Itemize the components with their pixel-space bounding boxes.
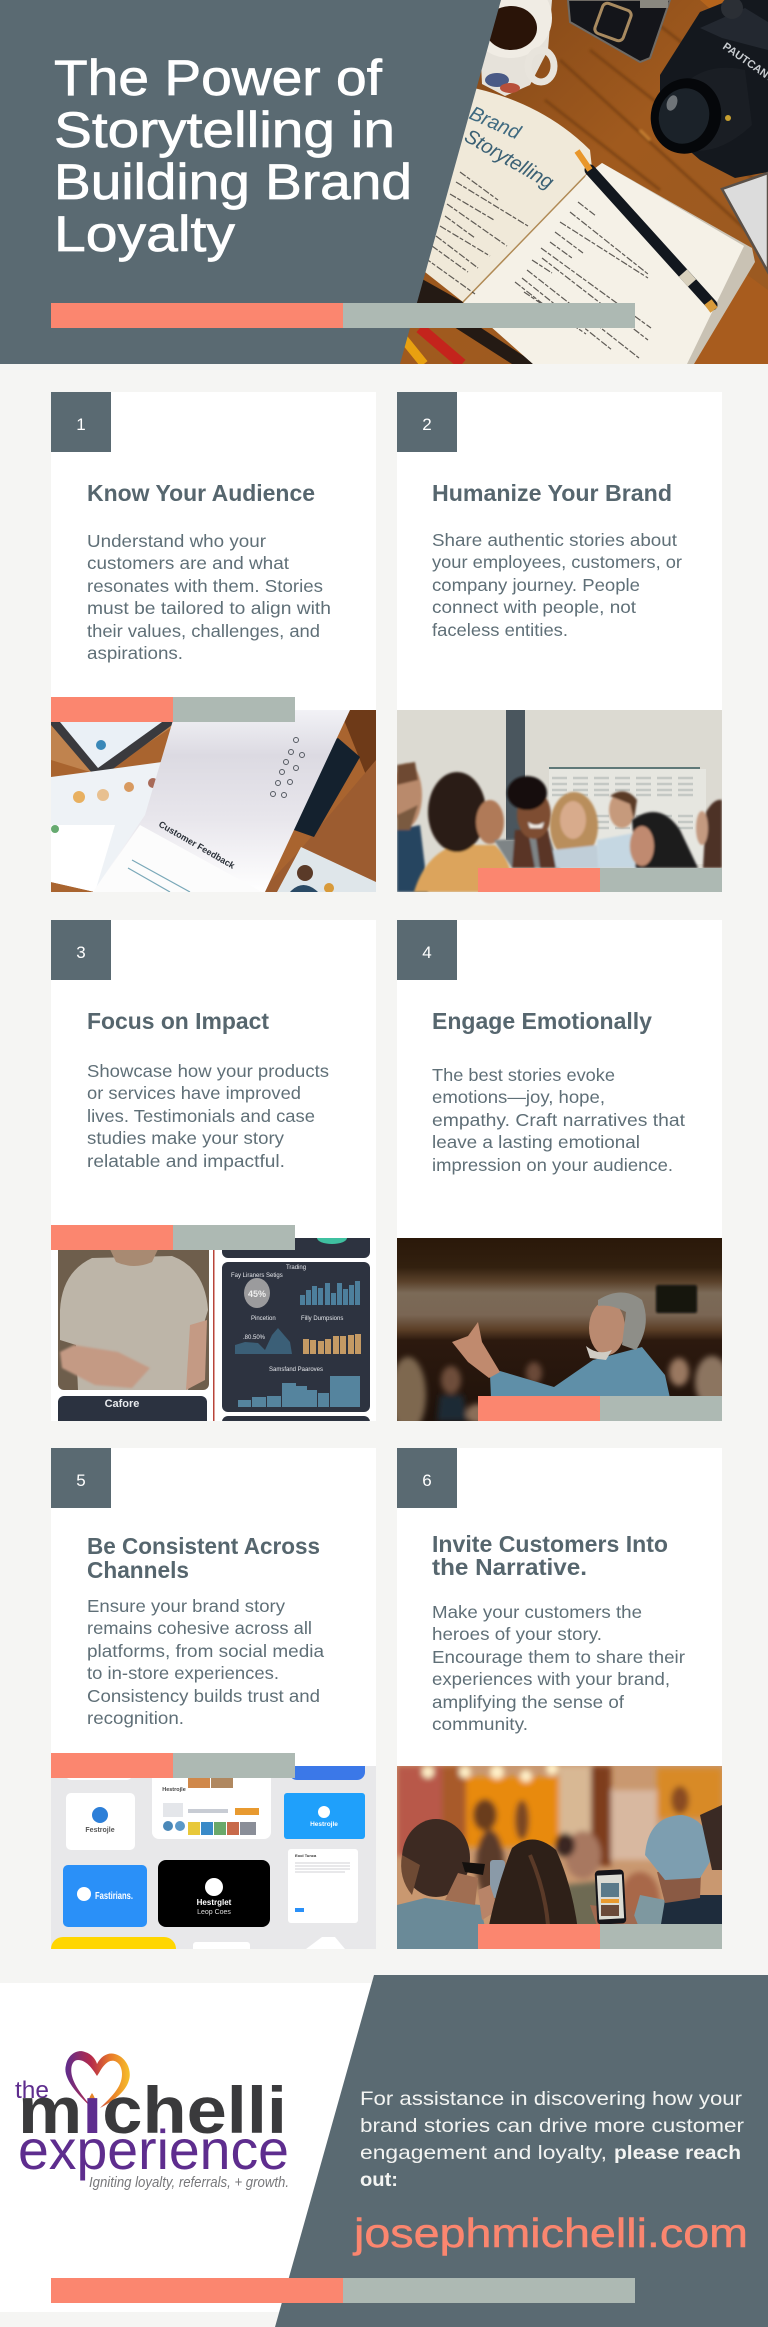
bottom bar chart (238, 1376, 360, 1407)
yellow card (51, 1937, 176, 1967)
header photo: notebook, coffee and camera on wood desk (400, 0, 768, 364)
photo: smiling team in office (397, 710, 722, 892)
woman with curly hair (414, 772, 514, 892)
panel: card 3 focus on impact (51, 920, 376, 1436)
body text 4: empathy. Craft narratives that (432, 1110, 685, 1130)
number badge 5 (51, 1448, 111, 1508)
website link: josephmichelli.com (353, 2210, 748, 2256)
body text 2: faceless entities. (432, 620, 568, 640)
number badge 1: 1 (76, 415, 86, 434)
dashboard main panel: Pincetion (251, 1316, 276, 1322)
camera (641, 0, 768, 178)
website mockup: Hestrojle (162, 1787, 186, 1793)
heading 5: Be Consistent Across (87, 1533, 320, 1559)
raised hand (452, 1322, 500, 1378)
heading 5: Channels (87, 1557, 189, 1583)
tan bar chart (303, 1334, 361, 1354)
body text 5: platforms, from social media (87, 1641, 324, 1661)
body text 6: Encourage them to share their (432, 1647, 685, 1667)
donut chart: 45% (248, 1289, 266, 1299)
blurred audience (390, 1356, 729, 1433)
number badge 2 (397, 392, 457, 452)
body text 3: Showcase how your products (87, 1061, 329, 1081)
small white cards (193, 1937, 345, 1962)
logo tagline: Igniting loyalty, referrals, + growth. (89, 2174, 289, 2191)
handwriting (425, 172, 651, 358)
number badge 6: 6 (422, 1471, 432, 1490)
white logo card: Festrojle (85, 1827, 115, 1834)
panel: card 2 humanize your brand (392, 392, 722, 892)
coffee cup (468, 0, 554, 96)
black brand card (158, 1860, 270, 1927)
dark app card (58, 1396, 207, 1436)
blue brand card (63, 1865, 147, 1927)
body text 2 (432, 530, 682, 640)
body text 5: to in-store experiences. (87, 1663, 279, 1683)
call to action text (360, 2088, 745, 2191)
body text 2: your employees, customers, or (432, 552, 682, 572)
blonde woman (550, 792, 600, 868)
panel: card 4 engage emotionally (390, 920, 729, 1433)
woman at far right (696, 800, 722, 868)
call to action text: For assistance in discovering how your (360, 2088, 743, 2110)
number badge 4: 4 (422, 943, 432, 962)
wall speaker (656, 1285, 697, 1313)
body text 4: impression on your audience. (432, 1155, 673, 1175)
body text 1: aspirations. (87, 643, 183, 663)
title: Loyalty (54, 206, 235, 262)
phone with photo feed (590, 1869, 640, 1935)
body text 3: or services have improved (87, 1083, 301, 1103)
number badge 2: 2 (422, 415, 432, 434)
body text 6: community. (432, 1714, 528, 1734)
body text 1: their values, challenges, and (87, 621, 320, 641)
footer dark diagonal panel (275, 1975, 768, 2327)
portrait (58, 1240, 209, 1390)
photo: customer feedback papers (51, 710, 376, 892)
top bar chart (300, 1281, 360, 1305)
photo: customers sharing on phones (397, 1766, 722, 1949)
sky blue card: Hestrojle (310, 1821, 338, 1828)
lower left paper (51, 762, 162, 892)
wall chart (549, 767, 706, 864)
white logo card (66, 1793, 135, 1850)
body text 6: experiences with your brand, (432, 1669, 670, 1689)
man with blue cap (630, 1805, 722, 1949)
body text 6: Make your customers the (432, 1602, 642, 1622)
title (54, 50, 412, 262)
large feedback sheet: Customer Feedback (157, 819, 237, 871)
black brand card: Hestrglet (197, 1898, 232, 1907)
body text 3: lives. Testimonials and case (87, 1106, 315, 1126)
blue brand card: Fastirians. (95, 1891, 133, 1902)
logo heart (65, 2051, 130, 2108)
blurred venue backdrop (397, 1763, 722, 1930)
body text 1 (87, 531, 331, 663)
body text 5 (87, 1596, 324, 1728)
accent bar 3 (51, 1225, 295, 1250)
panel: card 1 know your audience (51, 392, 376, 893)
tablet at right (722, 173, 768, 272)
body text 6 (432, 1602, 685, 1734)
body text 3: relatable and impactful. (87, 1151, 285, 1171)
body text 1: resonates with them. Stories (87, 576, 323, 596)
speaker (452, 1292, 675, 1421)
body text 3 (87, 1061, 329, 1171)
number badge 4 (397, 920, 457, 980)
man in light shirt (597, 791, 642, 868)
heading 4: Engage Emotionally (432, 1008, 652, 1034)
area chart: .80.50% (243, 1335, 266, 1341)
photo: speaker addressing audience (397, 1238, 722, 1421)
logo word experience: experience (18, 2118, 289, 2181)
woman with long hair (478, 1839, 578, 1930)
letter document: Eool Tunca (295, 1853, 317, 1858)
body text 3: studies make your story (87, 1128, 284, 1148)
dashboard main panel: Filly Dumpsions (301, 1316, 343, 1322)
man at left (392, 762, 428, 892)
logo word michelli: mıchelli (18, 2073, 287, 2147)
dashboard main panel: Trading (286, 1265, 306, 1271)
number badge 6 (397, 1448, 457, 1508)
logo word the: the (15, 2077, 49, 2104)
heading 3: Focus on Impact (87, 1008, 269, 1034)
heading 2: Humanize Your Brand (432, 480, 672, 506)
call to action text: please reach (614, 2142, 741, 2164)
large feedback sheet (93, 710, 350, 892)
header accent bar (51, 303, 635, 328)
image: brand assets across channels (51, 1766, 376, 1949)
body text 5: Consistency builds trust and (87, 1686, 320, 1706)
man with big smile (494, 776, 560, 868)
dashboard main panel (222, 1262, 370, 1412)
title: The Power of (54, 50, 382, 106)
body text 4: emotions—joy, hope, (432, 1087, 605, 1107)
body text 2: Share authentic stories about (432, 530, 677, 550)
dashboard main panel: Samsfand Paaroves (269, 1367, 323, 1373)
area chart (235, 1328, 292, 1354)
body text 1: must be tailored to align with (87, 598, 331, 618)
footer (0, 1975, 768, 2327)
header banner (0, 0, 768, 364)
accent bar 5 (51, 1753, 295, 1778)
number badge 1 (51, 392, 111, 452)
body text 1: customers are and what (87, 553, 289, 573)
body text 4 (432, 1065, 685, 1175)
accent bar 2 (478, 868, 722, 892)
donut chart (244, 1278, 270, 1308)
heading 5 (87, 1533, 320, 1583)
number badge 3 (51, 920, 111, 980)
small black device (568, 0, 670, 62)
footer white band (0, 1983, 768, 2312)
sky blue card (284, 1793, 365, 1839)
body text 1: Understand who your (87, 531, 266, 551)
body text 2: connect with people, not (432, 597, 636, 617)
character card (277, 847, 376, 893)
body text 5: Ensure your brand story (87, 1596, 285, 1616)
accent bar 1 (51, 697, 295, 722)
heading 6 (432, 1531, 668, 1580)
dark-haired woman (630, 812, 698, 868)
accent bar 4 (478, 1396, 722, 1421)
title: Storytelling in (54, 102, 395, 158)
heading 6: the Narrative. (432, 1554, 587, 1580)
header dark diagonal panel (0, 0, 501, 364)
black brand card: Leop Coes (197, 1909, 231, 1916)
open notebook: Brand (466, 102, 524, 145)
heading 1: Know Your Audience (87, 480, 315, 506)
body text 5: recognition. (87, 1708, 184, 1728)
call to action text: engagement and loyalty, (360, 2142, 607, 2164)
footer accent bar (51, 2278, 635, 2303)
website mockup (152, 1760, 271, 1839)
body text 6: heroes of your story. (432, 1624, 602, 1644)
accent bar 6 (478, 1924, 722, 1949)
call to action text: brand stories can drive more customer (360, 2115, 745, 2137)
call to action text: out: (360, 2169, 398, 2191)
body text 5: remains cohesive across all (87, 1618, 312, 1638)
body text 4: The best stories evoke (432, 1065, 615, 1085)
number badge 3: 3 (76, 943, 86, 962)
logo flame (88, 2093, 95, 2106)
pencils (403, 318, 536, 364)
open notebook (400, 60, 755, 364)
body text 6: amplifying the sense of (432, 1692, 624, 1712)
tablet (51, 722, 176, 780)
dashboard lower panel (222, 1416, 370, 1436)
letter document (288, 1849, 358, 1923)
title: Building Brand (54, 154, 412, 210)
man with sunglasses and ponytail (397, 1819, 490, 1949)
body text 4: leave a lasting emotional (432, 1132, 640, 1152)
image: testimonial portrait and dashboard (58, 1238, 370, 1421)
black device (290, 738, 360, 837)
logo: the michelli experience (15, 2051, 289, 2191)
dashboard main panel: Fay Liraners Setigs (231, 1273, 283, 1279)
body text 2: company journey. People (432, 575, 640, 595)
dashboard top panel (222, 1225, 370, 1258)
heading 6: Invite Customers Into (432, 1531, 668, 1557)
pen (577, 151, 714, 310)
number badge 5: 5 (76, 1471, 86, 1490)
open notebook: Storytelling (460, 125, 557, 194)
panel: card 6 invite customers into the narrative (397, 1448, 722, 1949)
dark app card: Cafore (105, 1398, 139, 1410)
panel: card 5 be consistent across channels (51, 1448, 376, 1967)
